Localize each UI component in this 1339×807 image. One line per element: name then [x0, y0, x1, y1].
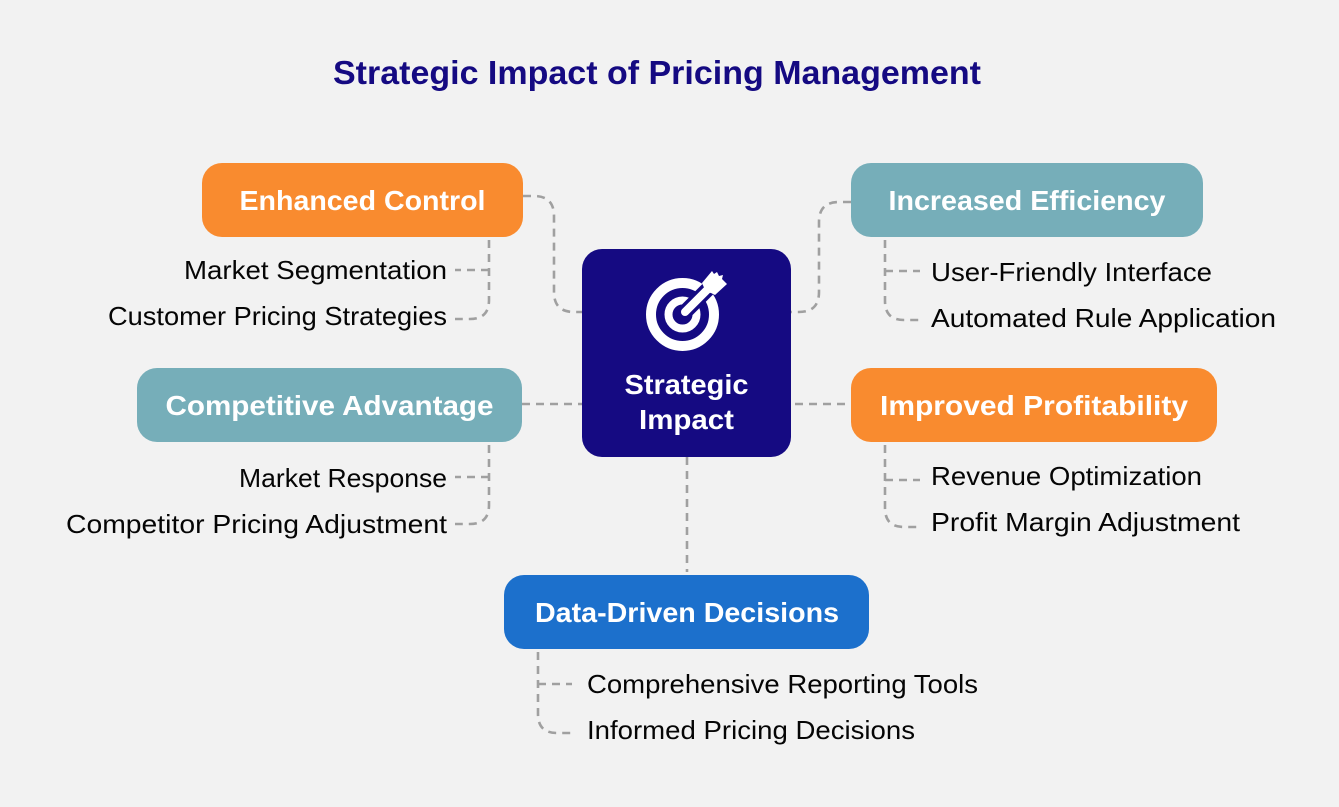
sub-items: Increased Efficiency — [885, 240, 1276, 333]
connector: center to Increased Efficiency — [791, 202, 851, 312]
panel: Increased Efficiency — [851, 163, 1203, 237]
panel: Improved Profitability — [851, 368, 1217, 442]
connector: center to Competitive Advantage — [522, 403, 582, 405]
sub-items: Improved Profitability — [885, 445, 1241, 537]
sub-items: Competitive Advantage — [66, 445, 489, 539]
panel: Enhanced Control — [202, 163, 523, 237]
panel: Strategic Impact center — [582, 249, 791, 457]
connector: center to Data-Driven Decisions — [686, 457, 688, 572]
heading: Increased Efficiency: Increased Efficiency — [888, 185, 1166, 216]
sub-items: Increased Efficiency: Automated Rule Application — [931, 303, 1276, 333]
sub-items: Data-Driven Decisions — [538, 652, 978, 745]
center label: Strategic — [624, 369, 748, 400]
title: Strategic Impact of Pricing Management — [333, 54, 981, 91]
heading: Data-Driven Decisions: Data-Driven Decisions — [535, 597, 839, 628]
sub-items: Data-Driven Decisions: Comprehensive Reporting Tools — [587, 669, 978, 699]
sub-items: Competitive Advantage: Competitor Pricing Adjustment — [66, 509, 448, 539]
sub-items: Increased Efficiency: User-Friendly Interface — [931, 257, 1212, 287]
panel: Competitive Advantage — [137, 368, 522, 442]
heading: Improved Profitability: Improved Profitability — [880, 390, 1188, 421]
sub-items: Enhanced Control: Market Segmentation — [184, 255, 447, 285]
sub-items: Data-Driven Decisions: Informed Pricing Decisions — [587, 715, 915, 745]
connector: center to Improved Profitability — [795, 403, 851, 405]
sub-items: Enhanced Control — [108, 240, 489, 331]
sub-items: Improved Profitability: Revenue Optimization — [931, 461, 1202, 491]
panel: Data-Driven Decisions — [504, 575, 869, 649]
sub-items: Competitive Advantage: Market Response — [239, 463, 447, 493]
sub-items: Enhanced Control: Customer Pricing Strategies — [108, 301, 447, 331]
connector: center to Enhanced Control — [523, 196, 582, 312]
heading: Competitive Advantage: Competitive Advantage — [166, 390, 494, 421]
panel: Strategic Impact center: Impact — [639, 404, 734, 435]
icon: target with arrow — [651, 271, 727, 346]
heading: Enhanced Control: Enhanced Control — [240, 185, 486, 216]
sub-items: Improved Profitability: Profit Margin Adjustment — [931, 507, 1241, 537]
